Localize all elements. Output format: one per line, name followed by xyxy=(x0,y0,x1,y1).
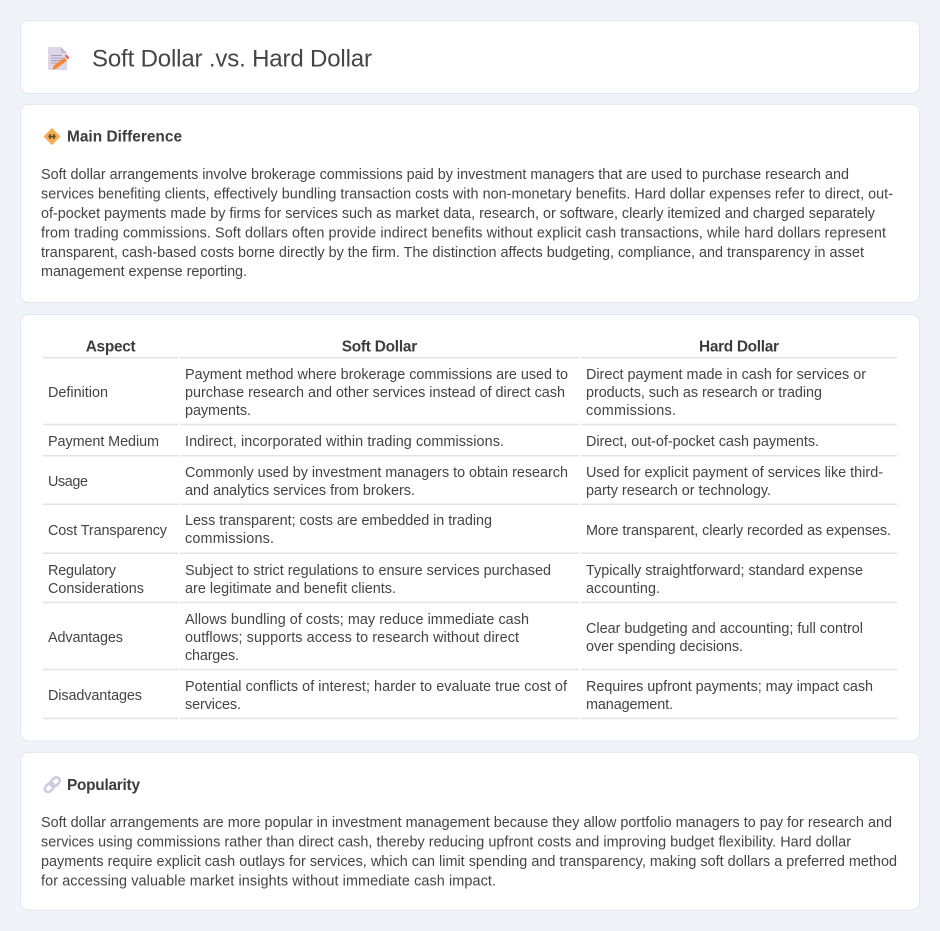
text block: popularity paragraph xyxy=(41,815,897,890)
table row: regulatory considerations: Regulatory xyxy=(48,563,117,579)
panel: popularity xyxy=(20,752,920,910)
table row: cost transparency: Less transparent; costs are embedded in trading xyxy=(185,513,492,529)
table row: definition: products, such as research or trading xyxy=(586,385,822,401)
title: Soft Dollar .vs. Hard Dollar xyxy=(92,46,372,72)
table row: definition: Direct payment made in cash for services or xyxy=(586,367,866,383)
table row: usage xyxy=(43,465,897,505)
text block: popularity paragraph: Soft dollar arrangements are more popular in investment management because they allow portfolio managers to pay for research and xyxy=(41,815,892,831)
text block: main difference paragraph: Soft dollar arrangements involve brokerage commissions paid by investment managers that are used to purchase research and xyxy=(41,167,849,183)
table row: disadvantages: services. xyxy=(185,697,241,713)
heading: main difference: Main Difference xyxy=(67,129,182,146)
text block: main difference paragraph: of-pocket payments made by firms for services such as market data, research, or software, clearly itemized and charged separately xyxy=(41,206,876,222)
table row: cost transparency: Cost Transparency xyxy=(48,523,168,539)
table row: payment medium: Direct, out-of-pocket cash payments. xyxy=(586,434,819,450)
text block: popularity paragraph: services using commissions rather than direct cash, thereby reducing upfront costs and improving budget flexibility. Hard dollar xyxy=(41,834,851,850)
table row: cost transparency: More transparent, clearly recorded as expenses. xyxy=(586,523,891,539)
table row: advantages: Allows bundling of costs; may reduce immediate cash xyxy=(185,612,529,628)
heading: popularity: Popularity xyxy=(67,777,140,794)
table row: usage: Used for explicit payment of services like third- xyxy=(586,465,883,481)
table row: definition: Payment method where brokerage commissions are used to xyxy=(185,367,568,383)
table row: advantages: Clear budgeting and accounting; full control xyxy=(586,621,863,637)
table row: disadvantages: Disadvantages xyxy=(48,688,142,704)
table row: usage: party research or technology. xyxy=(586,483,771,499)
table row: advantages: charges. xyxy=(185,648,239,664)
table header row: Hard Dollar xyxy=(699,339,779,356)
table row: payment medium xyxy=(43,434,897,456)
panel: main difference xyxy=(20,104,920,302)
table row: cost transparency: commissions. xyxy=(185,531,274,547)
table row: usage: Usage xyxy=(48,474,88,490)
table row: advantages: Advantages xyxy=(48,630,123,646)
text block: popularity paragraph: for accessing valuable market insights without immediate cash impact. xyxy=(41,874,496,890)
table row: payment medium: Payment Medium xyxy=(48,434,159,450)
table row: usage: and analytics services from brokers. xyxy=(185,483,415,499)
table row: usage: Commonly used by investment managers to obtain research xyxy=(185,465,568,481)
text block: main difference paragraph: from trading commissions. Soft dollars often provide indirect benefits without explicit cash transactions, while hard dollars represent xyxy=(41,226,886,242)
table row: cost transparency xyxy=(43,513,897,554)
table row: definition xyxy=(43,367,897,425)
table row: regulatory considerations: Considerations xyxy=(48,581,144,597)
table row: disadvantages xyxy=(43,679,897,719)
table row: advantages: outflows; supports access to research without direct xyxy=(185,630,519,646)
icon: memo with pencil xyxy=(48,47,69,70)
table row: definition: payments. xyxy=(185,403,251,419)
table row: payment medium: Indirect, incorporated within trading commissions. xyxy=(185,434,504,450)
text block: main difference paragraph: management expense reporting. xyxy=(41,264,247,280)
table row: disadvantages: management. xyxy=(586,697,673,713)
table row: regulatory considerations: accounting. xyxy=(586,581,660,597)
table row: regulatory considerations xyxy=(43,563,897,603)
table row: advantages: over spending decisions. xyxy=(586,639,743,655)
table row: definition: Definition xyxy=(48,385,108,401)
table row: definition: purchase research and other services instead of direct cash xyxy=(185,385,565,401)
icon: orange diamond xyxy=(44,128,60,145)
table header row xyxy=(43,339,897,358)
text block: main difference paragraph: services benefiting clients, effectively bundling transaction costs with non-monetary benefits. Hard dollar expenses refer to direct, out- xyxy=(41,186,893,202)
panel: title header xyxy=(20,20,920,94)
table row: regulatory considerations: are legitimate and benefit clients. xyxy=(185,581,396,597)
panel: comparison table xyxy=(20,314,920,741)
table row: regulatory considerations: Typically straightforward; standard expense xyxy=(586,563,863,579)
table row: definition: commissions. xyxy=(586,403,676,419)
table header row: Aspect xyxy=(86,339,136,356)
table row: advantages xyxy=(43,612,897,670)
table row: disadvantages: Requires upfront payments; may impact cash xyxy=(586,679,873,695)
text block: main difference paragraph: transparent, cash-based costs borne directly by the firm. The distinction affects budgeting, compliance, and transparency in asset xyxy=(41,245,864,261)
table row: regulatory considerations: Subject to strict regulations to ensure services purchased xyxy=(185,563,551,579)
table header row: Soft Dollar xyxy=(342,339,417,356)
text block: main difference paragraph xyxy=(41,167,893,280)
text block: popularity paragraph: payments require explicit cash outlays for services, which can limit spending and transparency, making soft dollars a preferred method xyxy=(41,854,897,870)
table row: disadvantages: Potential conflicts of interest; harder to evaluate true cost of xyxy=(185,679,568,695)
icon: chain link xyxy=(43,776,61,794)
